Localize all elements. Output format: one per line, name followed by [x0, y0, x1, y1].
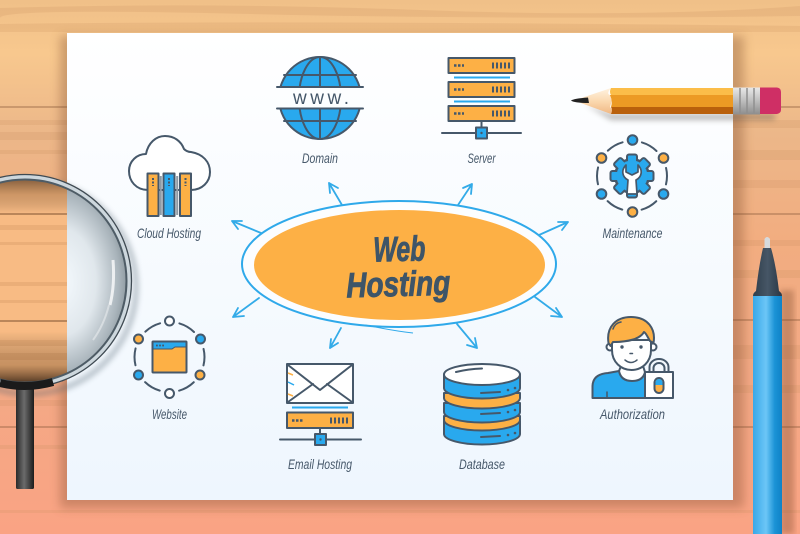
pen cap [753, 248, 782, 296]
label: website: Website [152, 406, 187, 422]
label: cloud hosting: Cloud Hosting [137, 225, 201, 241]
arrow to authorization [535, 297, 562, 317]
icon: database stack [444, 364, 520, 445]
paper sheet [67, 33, 733, 500]
central oval [242, 201, 556, 333]
pen shadow [780, 290, 794, 534]
lens rim [0, 177, 129, 385]
database item [444, 364, 520, 472]
email hosting item [280, 364, 361, 472]
pencil [571, 88, 781, 120]
icon: globe: www. [292, 88, 349, 109]
authorization item [592, 317, 673, 422]
title: Web [373, 229, 426, 270]
pencil ferrule [733, 88, 760, 114]
pen [753, 237, 794, 534]
pencil body [610, 88, 733, 95]
oval outer ring [242, 201, 556, 327]
lens glass [0, 180, 126, 382]
arrow to database [457, 324, 477, 348]
label: server: Server [468, 150, 496, 166]
label: authorization: Authorization [599, 406, 665, 422]
label: database: Database [459, 456, 505, 472]
domain item [277, 57, 363, 166]
pen body [753, 296, 782, 534]
ring sketch stroke [365, 325, 413, 333]
arrow to maintenance [539, 222, 568, 235]
arrows [232, 183, 568, 348]
cloud hosting item [129, 136, 210, 241]
handle [16, 388, 34, 489]
icon: folder with ring [134, 316, 205, 398]
server item [442, 58, 521, 166]
arrow to domain [329, 183, 342, 205]
lens shadow [0, 180, 136, 394]
label: email hosting: Email Hosting [288, 456, 352, 472]
arrow to email hosting [330, 328, 341, 348]
label: domain: Domain [302, 150, 338, 166]
magnifying glass [0, 170, 137, 489]
icon: person with lock [592, 317, 673, 398]
pencil eraser [760, 88, 781, 114]
label: maintenance: Maintenance [602, 225, 663, 241]
icon: server rack [442, 58, 521, 138]
title: Hosting [346, 264, 451, 305]
icon: gear with ring [597, 135, 668, 217]
arrow to server [458, 184, 472, 205]
oval orange fill [254, 210, 545, 320]
rim dark base [0, 382, 53, 386]
arrow to cloud hosting [232, 221, 261, 233]
icon: envelope and server [280, 364, 361, 445]
icon: cloud with servers [129, 136, 210, 216]
pencil tip [574, 88, 613, 114]
website item [134, 316, 205, 422]
title [345, 229, 451, 305]
arrow to website [233, 298, 259, 317]
maintenance item [597, 135, 668, 241]
paper shadow [60, 36, 744, 508]
pencil shadow [585, 104, 775, 120]
pen metal tip [764, 237, 770, 248]
